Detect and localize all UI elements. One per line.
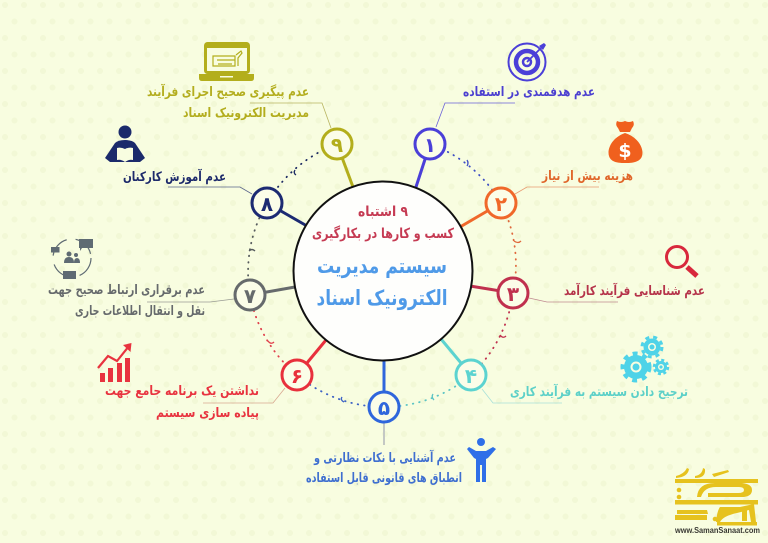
- node 2: ۲: [495, 192, 507, 216]
- ring arrow marks: [249, 160, 521, 402]
- label 8: عدم آموزش کارکنان: [123, 168, 226, 185]
- logo: [675, 468, 758, 526]
- hub subtitle: ۹ اشتباه: [358, 204, 408, 220]
- icon: shrugging person: [467, 438, 496, 482]
- node 9: ۹: [331, 133, 343, 157]
- label 6: [105, 384, 259, 421]
- spokes connecting hub and nodes: [250, 144, 513, 407]
- icon: magnifier: [666, 246, 697, 276]
- label 1: عدم هدفمندی در استفاده: [463, 85, 595, 100]
- label 5: عدم آشنایی با نکات نظارتی و: [313, 449, 456, 466]
- node 1: [415, 129, 445, 159]
- label 7: [48, 283, 205, 319]
- label 4: ترجیح دادن سیستم به فرآیند کاری: [510, 383, 688, 400]
- label 3: عدم شناسایی فرآیند کارآمد: [564, 282, 705, 299]
- icon: growth chart: [98, 343, 132, 382]
- hub title: الکترونیک اسناد: [316, 286, 448, 310]
- hub title: [316, 254, 448, 310]
- node 9: [322, 129, 352, 159]
- node 1: ۱: [424, 133, 436, 157]
- node 7: [235, 280, 265, 310]
- node 6: [282, 360, 312, 390]
- label 7: نقل و انتقال اطلاعات جاری: [75, 304, 205, 319]
- label 9: [147, 83, 309, 121]
- node 2: [486, 188, 516, 218]
- label 5: انطباق های قانونی قابل استفاده: [306, 471, 462, 486]
- central hub: [294, 182, 472, 360]
- leader lines: [147, 103, 618, 445]
- node 5: ۵: [378, 396, 390, 420]
- icon: gears: [622, 337, 668, 380]
- hub subtitle: [312, 204, 455, 242]
- icon: money bag: $: [618, 140, 632, 162]
- node 5: [369, 392, 399, 422]
- label 5: [306, 449, 462, 486]
- icon: target: [508, 43, 546, 80]
- icon: team communication: [51, 239, 93, 279]
- node 3: [498, 278, 528, 308]
- node 7: ۷: [244, 284, 256, 308]
- node 3: ۳: [507, 282, 519, 306]
- hub title: سیستم مدیریت: [317, 254, 447, 278]
- node 8: ۸: [261, 192, 273, 216]
- node 4: [456, 360, 486, 390]
- icon: person reading: [105, 126, 145, 162]
- node 8: [252, 188, 282, 218]
- label 6: پیاده سازی سیستم: [156, 406, 259, 421]
- hub subtitle: کسب و کارها در بکارگیری: [312, 225, 455, 242]
- label 6: نداشتن یک برنامه جامع جهت: [105, 384, 259, 399]
- label 9: عدم پیگیری صحیح اجرای فرآیند: [147, 83, 309, 100]
- node 4: ۴: [465, 364, 477, 388]
- label 9: مدیریت الکترونیک اسناد: [183, 106, 309, 121]
- label 7: عدم برقراری ارتباط صحیح جهت: [48, 283, 205, 298]
- label 2: هزینه بیش از نیاز: [541, 169, 633, 184]
- icon: money bag: [609, 121, 642, 163]
- node 6: ۶: [291, 364, 303, 388]
- icon: laptop: [199, 44, 254, 81]
- dotted ring between nodes: [248, 144, 516, 407]
